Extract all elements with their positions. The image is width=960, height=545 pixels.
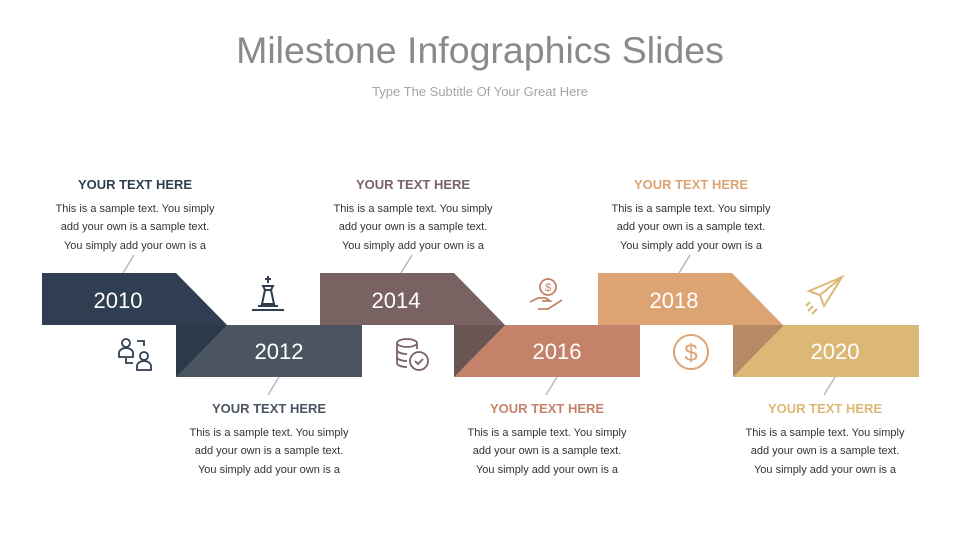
ribbon 2010 [42, 273, 227, 325]
ribbon 2010: 2010 [94, 288, 142, 313]
text block 2014: You simply add your own is a [342, 240, 485, 252]
icon: hand coin: $ [545, 282, 551, 294]
ribbon 2020: 2020 [811, 339, 859, 364]
subtitle: Type The Subtitle Of Your Great Here [372, 84, 588, 99]
text block 2014 [334, 177, 493, 252]
text block 2018: You simply add your own is a [620, 240, 763, 252]
ribbon 2016 [454, 325, 640, 377]
ribbon 2014 [320, 273, 505, 325]
text block 2020: YOUR TEXT HERE [768, 401, 882, 416]
text block 2018: YOUR TEXT HERE [634, 177, 748, 192]
icon: hand coin [530, 279, 562, 309]
icon: people swap [119, 339, 151, 370]
text block 2010: You simply add your own is a [64, 240, 207, 252]
ribbon 2020 [733, 325, 919, 377]
text block 2014: This is a sample text. You simply [334, 203, 493, 215]
text block 2020: add your own is a sample text. [751, 445, 899, 457]
icon: dollar circle [674, 335, 708, 369]
text block 2016: You simply add your own is a [476, 464, 619, 476]
title: Milestone Infographics Slides [236, 29, 724, 71]
ribbon 2018: 2018 [650, 288, 698, 313]
icon: database check [397, 339, 428, 370]
text block 2018: add your own is a sample text. [617, 221, 765, 233]
text block 2016: add your own is a sample text. [473, 445, 621, 457]
icon: dollar circle: $ [684, 340, 698, 367]
text block 2020 [746, 401, 905, 476]
leader lines [123, 255, 835, 395]
text block 2010: This is a sample text. You simply [56, 203, 215, 215]
text block 2010: YOUR TEXT HERE [78, 177, 192, 192]
text block 2014: add your own is a sample text. [339, 221, 487, 233]
text block 2016: This is a sample text. You simply [468, 427, 627, 439]
text block 2010 [56, 177, 215, 252]
icon: paper plane [806, 277, 842, 314]
text block 2020: This is a sample text. You simply [746, 427, 905, 439]
text block 2012: YOUR TEXT HERE [212, 401, 326, 416]
text block 2018: This is a sample text. You simply [612, 203, 771, 215]
text block 2018 [612, 177, 771, 252]
text block 2012: add your own is a sample text. [195, 445, 343, 457]
text block 2012 [190, 401, 349, 476]
icon: chess king [252, 276, 284, 310]
ribbon 2018 [598, 273, 783, 325]
ribbon 2012: 2012 [255, 339, 303, 364]
ribbon 2016: 2016 [533, 339, 581, 364]
text block 2016 [468, 401, 627, 476]
ribbon 2014: 2014 [372, 288, 420, 313]
text block 2014: YOUR TEXT HERE [356, 177, 470, 192]
text block 2020: You simply add your own is a [754, 464, 897, 476]
text block 2012: You simply add your own is a [198, 464, 341, 476]
ribbon 2012 [176, 325, 362, 377]
text block 2010: add your own is a sample text. [61, 221, 209, 233]
text block 2016: YOUR TEXT HERE [490, 401, 604, 416]
text block 2012: This is a sample text. You simply [190, 427, 349, 439]
